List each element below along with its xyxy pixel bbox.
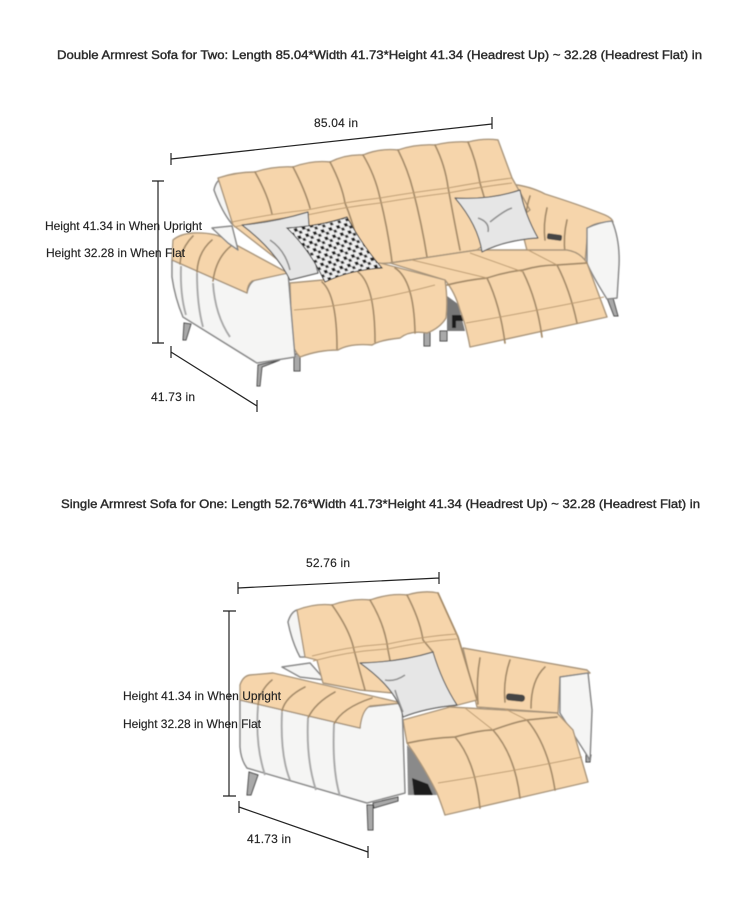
left arm peach top bbox=[172, 233, 288, 293]
right arm white end bbox=[560, 673, 592, 760]
left arm white side bbox=[172, 260, 295, 363]
recliner mechanism bbox=[447, 296, 465, 331]
left seat seams bbox=[294, 268, 435, 349]
dimension: length 52.76 in bbox=[238, 556, 439, 594]
pillow: white bbox=[360, 652, 457, 717]
left arm peach top bbox=[240, 673, 402, 728]
dimension: width 41.73 in bbox=[151, 346, 257, 412]
right arm white end bbox=[587, 221, 619, 299]
illustration: two-seat sofa bbox=[172, 139, 619, 386]
backrest seams bbox=[312, 593, 477, 700]
dimension: height: Height 32.28 in When Flat bbox=[123, 717, 262, 731]
control panel bbox=[547, 233, 562, 241]
small white cushion bbox=[212, 226, 238, 250]
dimension: height: Height 41.34 in When Upright bbox=[45, 219, 203, 233]
right seat seams bbox=[412, 250, 604, 343]
dimension: length 85.04 in bbox=[171, 116, 492, 165]
dimension: length 85.04 in: 85.04 in bbox=[314, 116, 358, 130]
sofa legs bbox=[247, 755, 591, 830]
left seat bbox=[290, 263, 447, 357]
backrest seams bbox=[232, 142, 512, 262]
right arm ribs bbox=[526, 196, 567, 253]
left arm seams bbox=[257, 680, 372, 796]
backrest bbox=[218, 139, 530, 267]
dimension: height bbox=[123, 611, 282, 796]
left arm seams bbox=[180, 236, 231, 337]
recliner mechanism bbox=[407, 745, 437, 795]
left arm white side bbox=[240, 700, 405, 803]
dimension: height: Height 41.34 in When Upright bbox=[123, 689, 282, 703]
title: double armrest sofa: Double Armrest Sofa for Two: Length 85.04*Width 41.73*Height 41.34 (Headrest Up) ~ 32.28 (Headrest Flat) in bbox=[57, 48, 702, 62]
pillow: white left bbox=[242, 212, 318, 280]
right arm peach top bbox=[510, 184, 613, 262]
pillow: white right bbox=[455, 190, 538, 252]
pillow: houndstooth bbox=[287, 217, 382, 282]
dimension: height: Height 32.28 in When Flat bbox=[46, 246, 186, 260]
right arm peach bbox=[463, 648, 590, 713]
title: single armrest sofa: Single Armrest Sofa for One: Length 52.76*Width 41.73*Height 41.34 (Headrest Up) ~ 32.28 (Headrest Flat) in bbox=[61, 497, 700, 511]
sofa legs bbox=[183, 298, 618, 386]
seat seams bbox=[408, 708, 582, 808]
dimension: width 41.73 in bbox=[239, 801, 368, 858]
dimension: length 52.76 in: 52.76 in bbox=[306, 556, 350, 570]
right reclined seat bbox=[390, 250, 607, 347]
dimension: height bbox=[45, 181, 203, 343]
illustration: one-seat sofa bbox=[240, 592, 592, 830]
headrest side bbox=[288, 610, 315, 657]
control panel bbox=[506, 693, 525, 702]
reclined seat bbox=[403, 707, 588, 815]
right arm ribs bbox=[477, 658, 545, 708]
small white cushion bbox=[282, 663, 325, 680]
dimension: width 41.73 in: 41.73 in bbox=[151, 390, 195, 404]
headrest side bbox=[214, 177, 240, 224]
dimension: width 41.73 in: 41.73 in bbox=[247, 832, 291, 846]
backrest bbox=[297, 592, 477, 707]
